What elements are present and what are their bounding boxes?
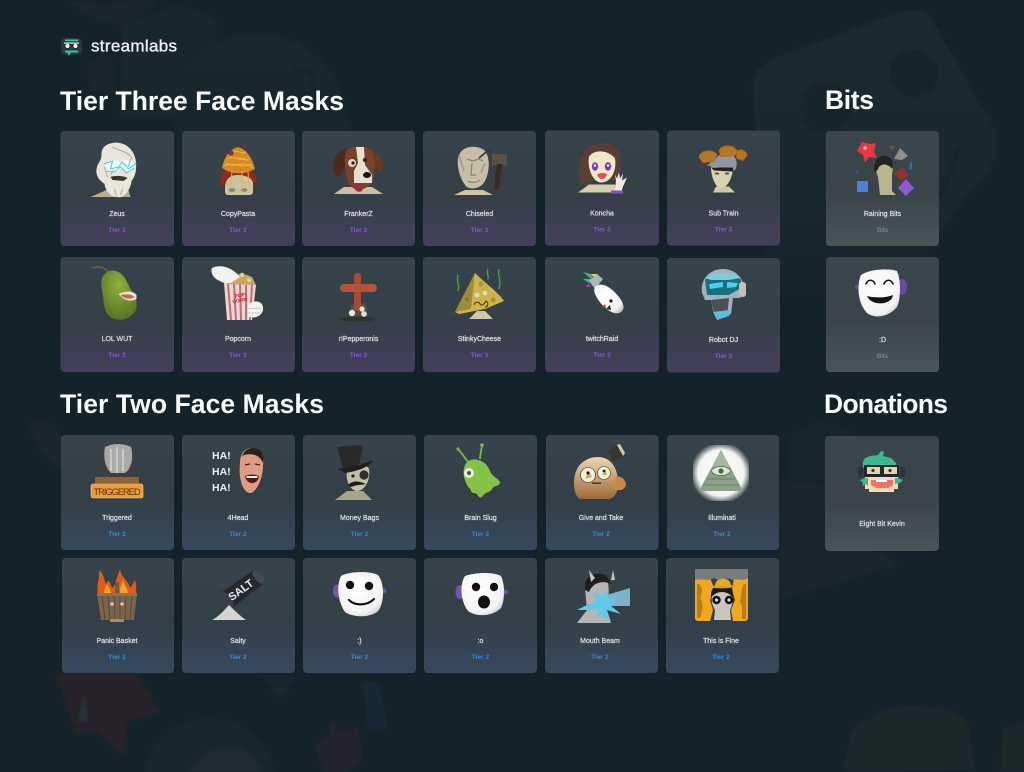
card: Give and Take: Give and Take (579, 515, 623, 522)
card: Raining Bits (826, 131, 939, 246)
icon: Salty: SALT (226, 577, 256, 604)
card: Eight Bit Kevin (825, 436, 939, 551)
icon: :o (456, 573, 508, 615)
card: Illuminati: Tier 2 (713, 531, 731, 538)
icon: Popcorn: POP (234, 292, 246, 300)
card: :D: Bits (877, 353, 889, 360)
icon: StinkyCheese (455, 269, 504, 319)
card: StinkyCheese: Tier 3 (471, 352, 489, 359)
icon: rIPepperonis (340, 273, 377, 322)
card: Zeus (60, 131, 174, 246)
card: twitchRaid (545, 257, 659, 372)
card: :o: Tier 2 (472, 654, 490, 661)
icon: Robot DJ (702, 269, 746, 320)
card: Money Bags (303, 435, 416, 550)
card: Sub Train: Tier 3 (715, 226, 733, 234)
icon: LOL WUT (92, 267, 137, 320)
card: Koncha (545, 130, 659, 246)
heading: Tier Two Face Masks: Tier Two Face Masks (60, 389, 324, 419)
card: StinkyCheese: StinkyCheese (458, 336, 501, 343)
icon: Raining Bits (856, 142, 914, 196)
card: :D: :D (879, 337, 886, 344)
card: Raining Bits: Bits (877, 227, 889, 234)
card: StinkyCheese (423, 257, 536, 372)
card: Brain Slug: Tier 2 (472, 531, 490, 538)
icon: :) (333, 572, 386, 616)
card: Zeus: Zeus (109, 211, 125, 218)
card: LOL WUT (60, 257, 174, 372)
card: Illuminati (667, 435, 779, 550)
card: Robot DJ (667, 258, 780, 372)
card: rIPepperonis: rIPepperonis (339, 336, 379, 343)
icon: 4Head: HA! (212, 482, 231, 494)
icon: Popcorn (211, 266, 263, 320)
card: Popcorn: Popcorn (225, 336, 251, 343)
card: Triggered: Tier 2 (108, 531, 126, 538)
card: rIPepperonis: Tier 3 (350, 352, 368, 359)
card: Chiseled: Chiseled (466, 211, 493, 218)
icon: 4Head: HA! (212, 466, 231, 478)
card: Mouth Beam (545, 558, 658, 673)
card: Salty (182, 558, 295, 673)
card: Zeus: Tier 3 (108, 227, 126, 234)
card: Sub Train: Sub Train (709, 210, 739, 218)
card: Chiseled (423, 131, 536, 246)
icon: Money Bags (335, 445, 373, 500)
card: Sub Train (667, 130, 780, 246)
card: Chiseled: Tier 3 (471, 227, 489, 234)
card: Mouth Beam: Mouth Beam (580, 638, 620, 645)
card: Popcorn: Tier 3 (229, 352, 247, 359)
card: Salty: Tier 2 (229, 654, 247, 661)
card: Brain Slug: Brain Slug (464, 515, 497, 522)
card: Money Bags: Money Bags (340, 515, 379, 522)
card: :o (424, 558, 537, 673)
icon: Sub Train (699, 146, 747, 192)
icon: 4Head: HA! (212, 450, 231, 462)
card: Triggered: Triggered (102, 515, 132, 522)
card: Illuminati: Illuminati (708, 515, 736, 522)
icon: :D (855, 269, 907, 316)
card: :o: :o (478, 638, 484, 645)
icon: twitchRaid (583, 272, 624, 313)
card: Eight Bit Kevin: Eight Bit Kevin (859, 521, 905, 528)
card: 4Head (182, 435, 295, 550)
card: This is Fine: Tier 2 (712, 654, 730, 661)
icon: Panic Basket (97, 570, 137, 622)
card: Koncha: Tier 3 (593, 226, 611, 234)
icon: Triggered: TRIGGERED (94, 487, 141, 497)
icon: Mouth Beam (577, 570, 630, 623)
card: Koncha: Koncha (590, 210, 614, 218)
icon: Koncha (578, 143, 627, 194)
card: Triggered (61, 435, 174, 550)
card: twitchRaid: twitchRaid (586, 336, 618, 343)
card: Salty: Salty (230, 638, 246, 645)
heading: Tier Three Face Masks: Tier Three Face Masks (60, 86, 344, 116)
heading: Donations: Donations (824, 389, 948, 419)
card: Mouth Beam: Tier 2 (591, 654, 609, 661)
card: Money Bags: Tier 2 (351, 531, 369, 538)
card: Robot DJ: Tier 3 (715, 353, 733, 360)
card: twitchRaid: Tier 3 (593, 352, 611, 359)
icon: Zeus (90, 143, 136, 197)
icon: Give and Take (574, 444, 626, 499)
card: Panic Basket: Tier 2 (108, 654, 126, 661)
card: LOL WUT: Tier 3 (108, 352, 126, 359)
card: :D (826, 257, 939, 372)
icon: Brain Slug (456, 443, 500, 497)
icon: This is Fine (695, 569, 748, 621)
card: Popcorn (182, 257, 295, 372)
icon: 4Head (212, 448, 263, 494)
icon: Popcorn: CORN (232, 297, 248, 305)
logo: streamlabs: streamlabs (91, 36, 177, 56)
card: :): :) (357, 638, 362, 645)
card: This is Fine (666, 558, 779, 673)
card: Give and Take: Tier 2 (592, 531, 610, 538)
card: Panic Basket (62, 558, 174, 673)
icon: Chiseled (454, 147, 507, 195)
card: LOL WUT: LOL WUT (102, 336, 133, 343)
icon: FrankerZ (333, 146, 383, 194)
heading: Bits: Bits (825, 85, 874, 115)
card: This is Fine: This is Fine (703, 638, 739, 645)
icon: Eight Bit Kevin (858, 451, 905, 492)
card: FrankerZ: FrankerZ (344, 211, 373, 218)
card: rIPepperonis (302, 257, 415, 372)
icon: CopyPasta (220, 144, 257, 195)
card: CopyPasta: Tier 3 (229, 227, 247, 234)
card: :): Tier 2 (351, 654, 369, 661)
card: CopyPasta: CopyPasta (221, 211, 255, 218)
card: Panic Basket: Panic Basket (97, 638, 137, 645)
icon: Illuminati (693, 445, 749, 501)
card: Robot DJ: Robot DJ (709, 337, 738, 344)
card: Give and Take (546, 435, 658, 550)
card: 4Head: 4Head (228, 515, 248, 522)
icon: streamlabs glasses (61, 38, 82, 56)
card: FrankerZ: Tier 3 (350, 227, 368, 234)
card: Brain Slug (424, 435, 537, 550)
card: 4Head: Tier 2 (229, 531, 247, 538)
card: CopyPasta (182, 131, 295, 246)
card: :) (303, 558, 416, 673)
card: FrankerZ (302, 131, 415, 246)
card: Raining Bits: Raining Bits (864, 211, 902, 218)
